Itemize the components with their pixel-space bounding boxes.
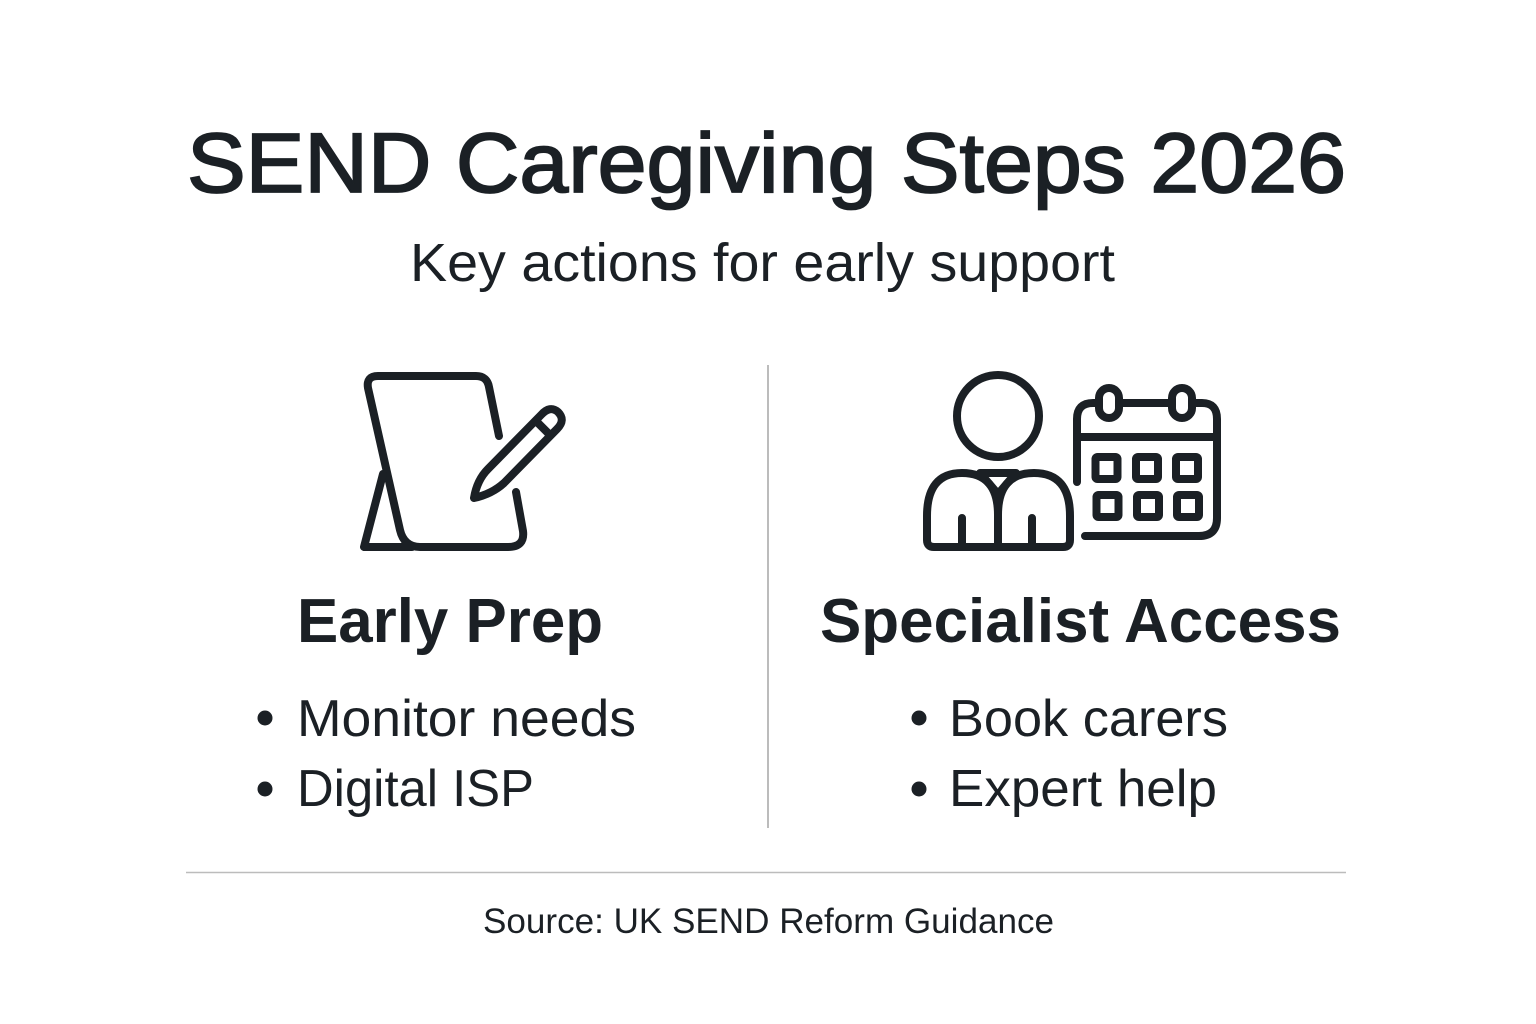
list: specialist access: Expert help — [949, 760, 1217, 818]
heading: Early Prep: Early Prep — [297, 587, 603, 656]
title: SEND Caregiving Steps 2026 — [187, 116, 1346, 210]
list: specialist access — [912, 690, 1228, 818]
list: specialist access: Book carers — [949, 690, 1228, 748]
list: early prep — [258, 690, 636, 818]
icon: specialist with calendar — [927, 375, 1217, 547]
heading: Specialist Access: Specialist Access — [820, 587, 1341, 656]
subtitle: Key actions for early support — [410, 233, 1115, 293]
list: early prep: Digital ISP — [297, 760, 534, 818]
list: early prep: Monitor needs — [297, 690, 636, 748]
icon: tablet and pencil — [364, 376, 562, 547]
source note: Source: UK SEND Reform Guidance — [483, 902, 1054, 941]
